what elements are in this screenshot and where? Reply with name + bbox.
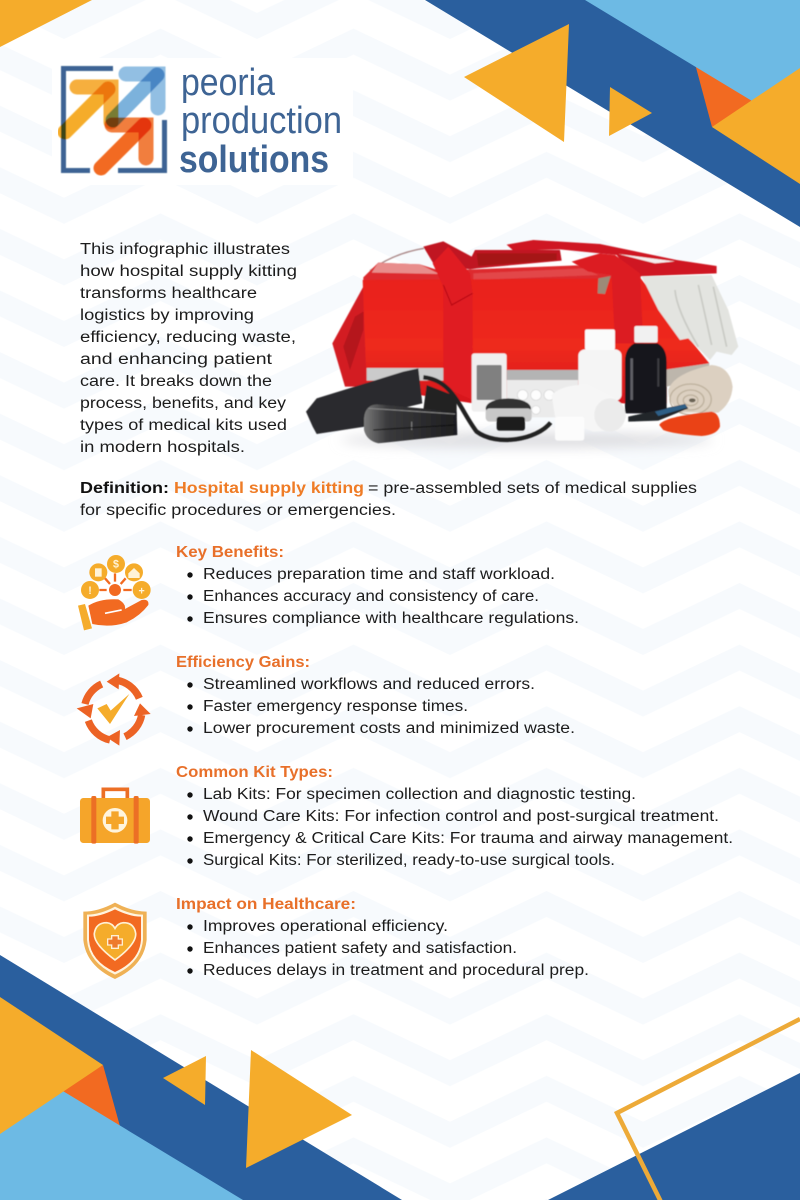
intro text block: process, benefits, and key (80, 395, 286, 412)
section: common kit types: Common Kit Types: (176, 764, 333, 781)
section: impact on healthcare (176, 896, 589, 979)
section: key benefits (176, 544, 579, 627)
orange case (659, 412, 720, 436)
medical bag photo illustration (306, 240, 738, 447)
back rim and wire (370, 248, 424, 271)
icon: hand holding coins (78, 555, 151, 630)
blister pack (507, 380, 578, 417)
cuff pouch (364, 404, 457, 443)
icon: cycle arrows with check (77, 673, 151, 746)
section: impact on healthcare: Impact on Healthcare: (176, 896, 356, 913)
section: common kit types: Lab Kits: For specimen collection and diagnostic testing. (203, 786, 636, 803)
gloves (642, 275, 738, 360)
definition text: = pre-assembled sets of medical supplies (368, 480, 697, 497)
definition text: for specific procedures or emergencies. (80, 502, 396, 519)
logo text (179, 62, 342, 181)
logo (52, 58, 353, 185)
section: efficiency gains (176, 654, 575, 737)
white bottle (578, 349, 622, 401)
zip pull (598, 276, 611, 294)
section: common kit types: Surgical Kits: For sterilized, ready-to-use surgical tools. (203, 852, 615, 869)
definition text: Definition: (80, 480, 169, 497)
dark bottle (625, 343, 667, 413)
logo text: solutions (179, 139, 329, 181)
glucose meter (472, 353, 507, 412)
pen (628, 404, 688, 422)
section: impact on healthcare: Enhances patient safety and satisfaction. (203, 940, 517, 957)
small cap (555, 417, 584, 441)
bag lid (363, 263, 641, 282)
section: key benefits: Reduces preparation time and staff workload. (203, 566, 555, 583)
section: common kit types: Wound Care Kits: For infection control and post-surgical treatment. (203, 808, 719, 825)
bottom-left geometric decoration (0, 955, 402, 1200)
bottom-right geometric decoration (548, 1019, 800, 1200)
intro text block: care. It breaks down the (80, 373, 272, 390)
section: impact on healthcare: Improves operational efficiency. (203, 918, 448, 935)
intro text block: in modern hospitals. (80, 439, 245, 456)
bandage roll (668, 365, 733, 413)
logo text: production (181, 100, 342, 142)
intro text block: efficiency, reducing waste, (80, 329, 296, 346)
top-left corner triangle (0, 0, 92, 47)
intro text block: how hospital supply kitting (80, 263, 297, 280)
intro text block: types of medical kits used (80, 417, 287, 434)
tube (423, 377, 551, 440)
definition text: Hospital supply kitting (174, 480, 364, 497)
pressure gauge (486, 398, 531, 418)
section: impact on healthcare: Reduces delays in treatment and procedural prep. (203, 962, 589, 979)
section: efficiency gains: Efficiency Gains: (176, 654, 310, 671)
section: key benefits: Enhances accuracy and consistency of care. (203, 588, 539, 605)
section: efficiency gains: Lower procurement costs and minimized waste. (203, 720, 575, 737)
section: key benefits: Ensures compliance with healthcare regulations. (203, 610, 579, 627)
logo mark (64, 68, 164, 170)
blood pressure cuff (306, 368, 422, 434)
grey reflective stripes (367, 368, 443, 381)
top-right geometric decoration (425, 0, 800, 227)
icon: hand holding coins: + (139, 585, 145, 597)
section: efficiency gains: Streamlined workflows and reduced errors. (203, 676, 535, 693)
definition text (80, 480, 697, 519)
center handle (423, 241, 562, 269)
intro text block: and enhancing patient (80, 351, 273, 368)
logo text: peoria (181, 62, 276, 104)
bag body (363, 278, 709, 403)
icon: hand holding coins: ! (88, 585, 92, 597)
section: common kit types: Emergency & Critical Care Kits: For trauma and airway management. (203, 830, 733, 847)
icon: hand holding coins: $ (113, 559, 119, 571)
icon: heart shield (83, 903, 147, 979)
icon: first aid case (80, 789, 150, 844)
intro text block (80, 241, 297, 456)
side strap (332, 287, 368, 387)
section: common kit types (176, 764, 733, 869)
intro text block: logistics by improving (80, 307, 254, 324)
carry straps (433, 247, 473, 400)
section: efficiency gains: Faster emergency response times. (203, 698, 468, 715)
intro text block: This infographic illustrates (80, 241, 290, 258)
intro text block: transforms healthcare (80, 285, 257, 302)
lying bottle (552, 385, 627, 432)
section: key benefits: Key Benefits: (176, 544, 284, 561)
